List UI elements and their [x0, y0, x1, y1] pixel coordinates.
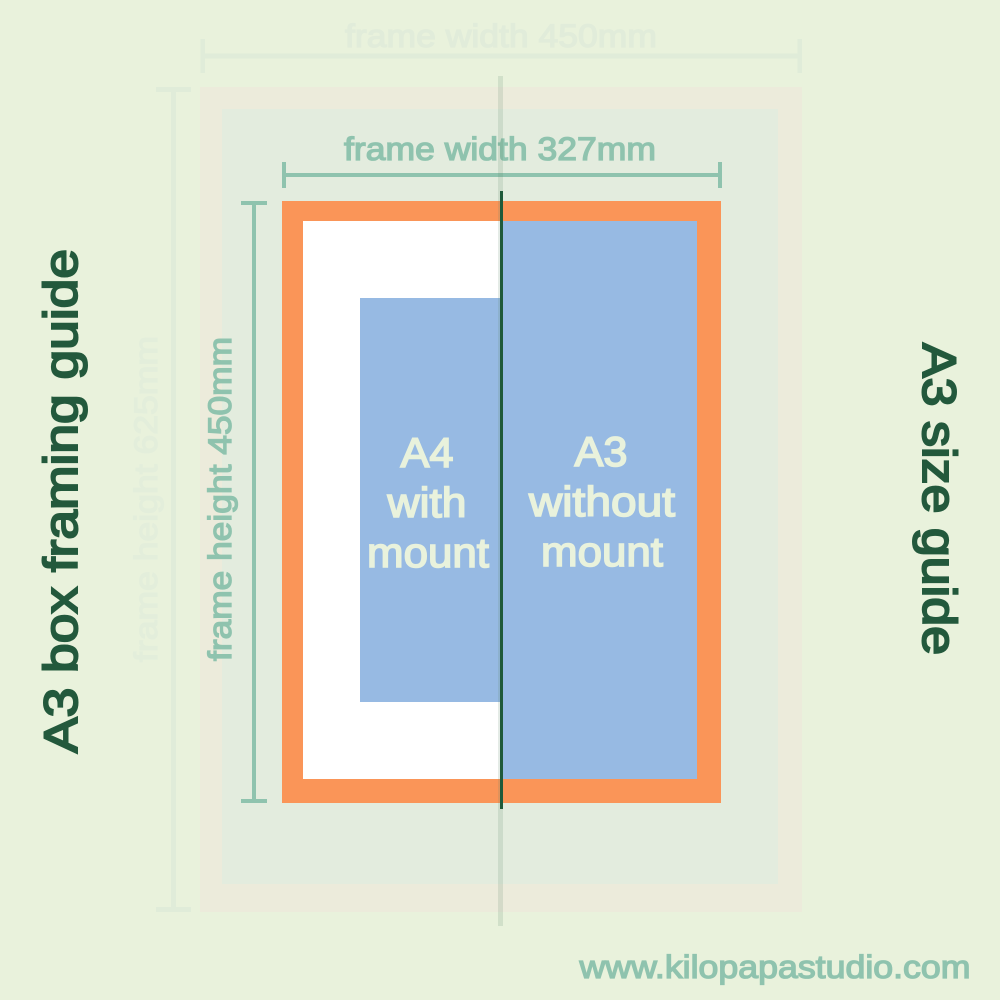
- outer height dimension: [128, 87, 191, 912]
- A4 label: with: [386, 479, 466, 526]
- outer height dimension: frame height 625mm: [128, 336, 164, 662]
- A4 label: [367, 429, 489, 576]
- inner height dimension: [202, 201, 267, 803]
- inner width dimension: [282, 131, 722, 188]
- A3 label: A3: [574, 428, 628, 475]
- A4 label: A4: [400, 429, 454, 476]
- inner height dimension: frame height 450mm: [202, 337, 238, 661]
- outer width dimension: frame width 450mm: [345, 18, 657, 54]
- inner width dimension: frame width 327mm: [344, 131, 656, 167]
- A3 label: mount: [541, 528, 663, 575]
- orange frame: [282, 201, 721, 803]
- white mount: [303, 221, 501, 779]
- A3 label: without: [528, 478, 675, 525]
- A4 label: mount: [367, 529, 489, 576]
- A3 label: [528, 428, 675, 575]
- translucent vertical guide: [498, 76, 503, 926]
- right title: A3 size guide: [913, 343, 966, 655]
- outer width dimension: [200, 18, 802, 73]
- centre divider: [500, 191, 503, 809]
- outer frame inner panel: [222, 109, 778, 884]
- outer box frame: [200, 87, 802, 912]
- left title: A3 box framing guide: [34, 249, 87, 753]
- A4 print: [360, 298, 501, 702]
- A3 print: [501, 221, 697, 779]
- website: www.kilopapastudio.com: [578, 949, 970, 985]
